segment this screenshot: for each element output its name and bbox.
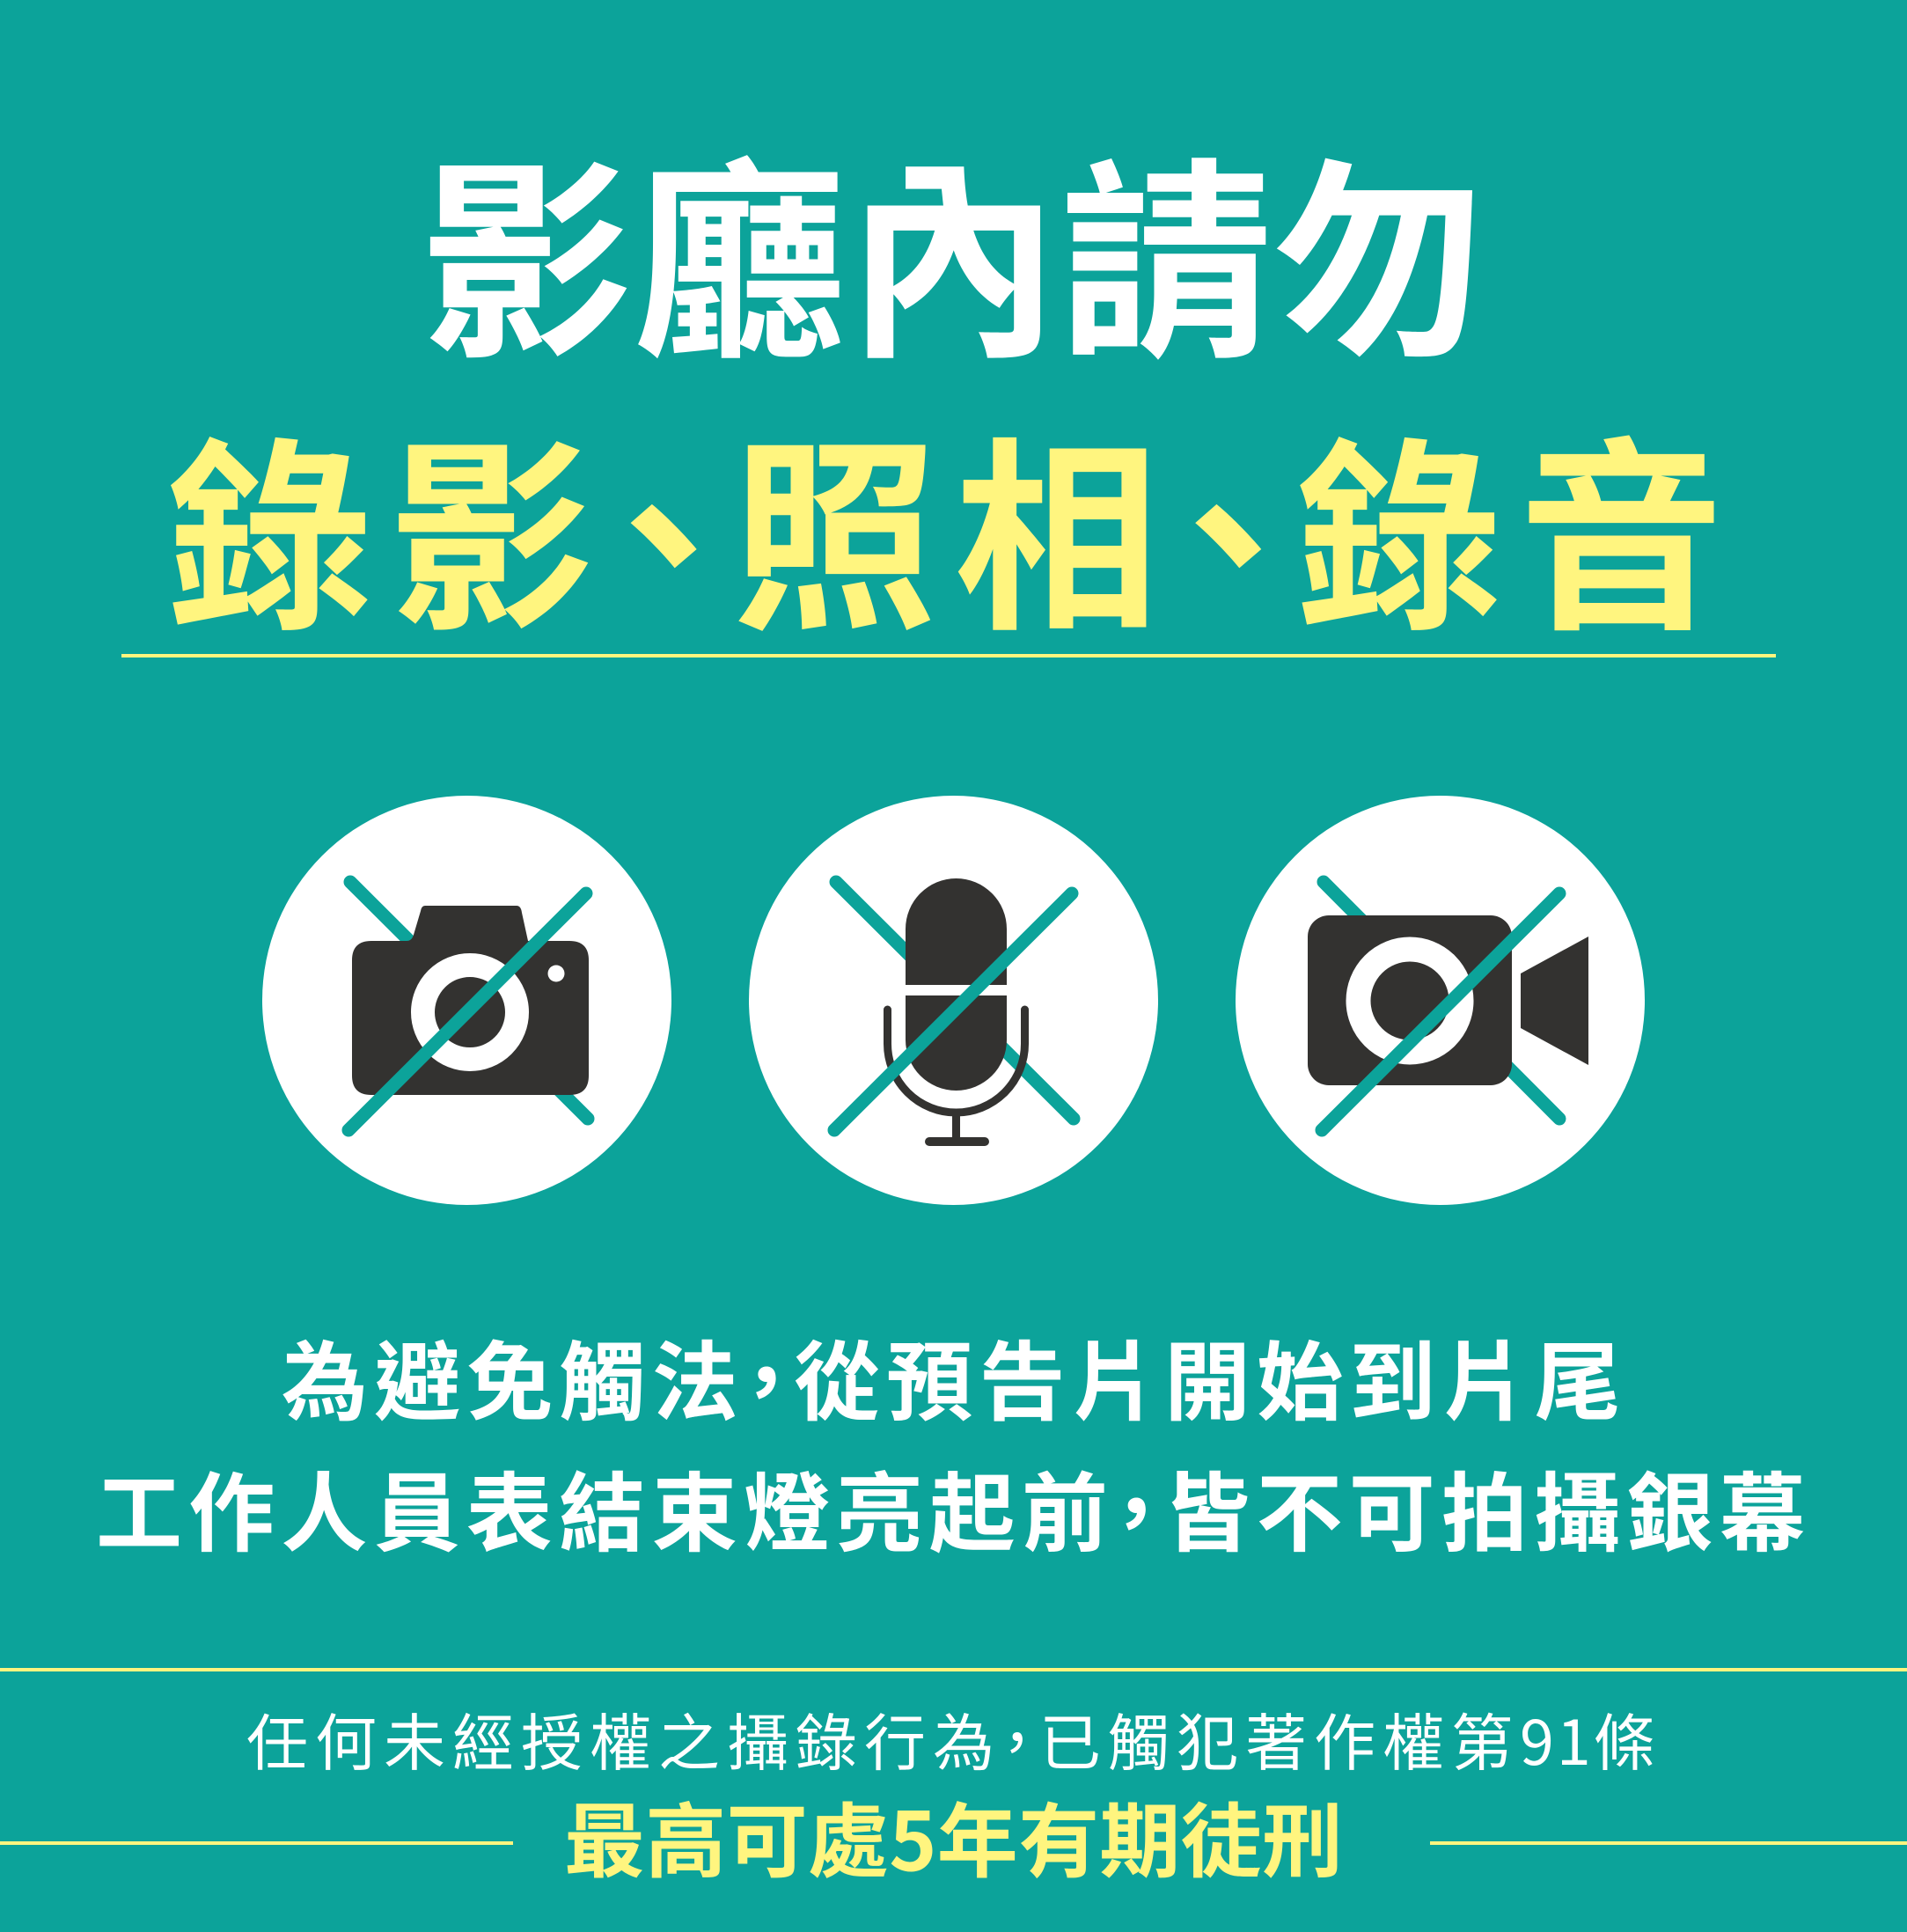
title: highlighted second line: 錄影、照相、錄音 (167, 375, 1742, 672)
icon: no microphone (749, 796, 1158, 1205)
icon: no camera (262, 796, 671, 1205)
body text line 1: 為避免觸法，從預告片開始到片尾 (282, 1313, 1627, 1438)
yellow rule under title (121, 654, 1776, 657)
icon: no video camera (1236, 796, 1645, 1205)
footer rule left (0, 1841, 513, 1845)
body text line 2: 工作人員表結束燈亮起前，皆不可拍攝銀幕 (96, 1444, 1812, 1569)
yellow rule above footer (0, 1668, 1907, 1671)
footer rule right (1430, 1841, 1907, 1845)
footer penalty text: 最高可處5年有期徒刑 (564, 1777, 1343, 1894)
footer legal notice: 任何未經授權之攝錄行為，已觸犯著作權第91條 (246, 1694, 1662, 1783)
title: first line: 影廳內請勿 (421, 92, 1485, 400)
